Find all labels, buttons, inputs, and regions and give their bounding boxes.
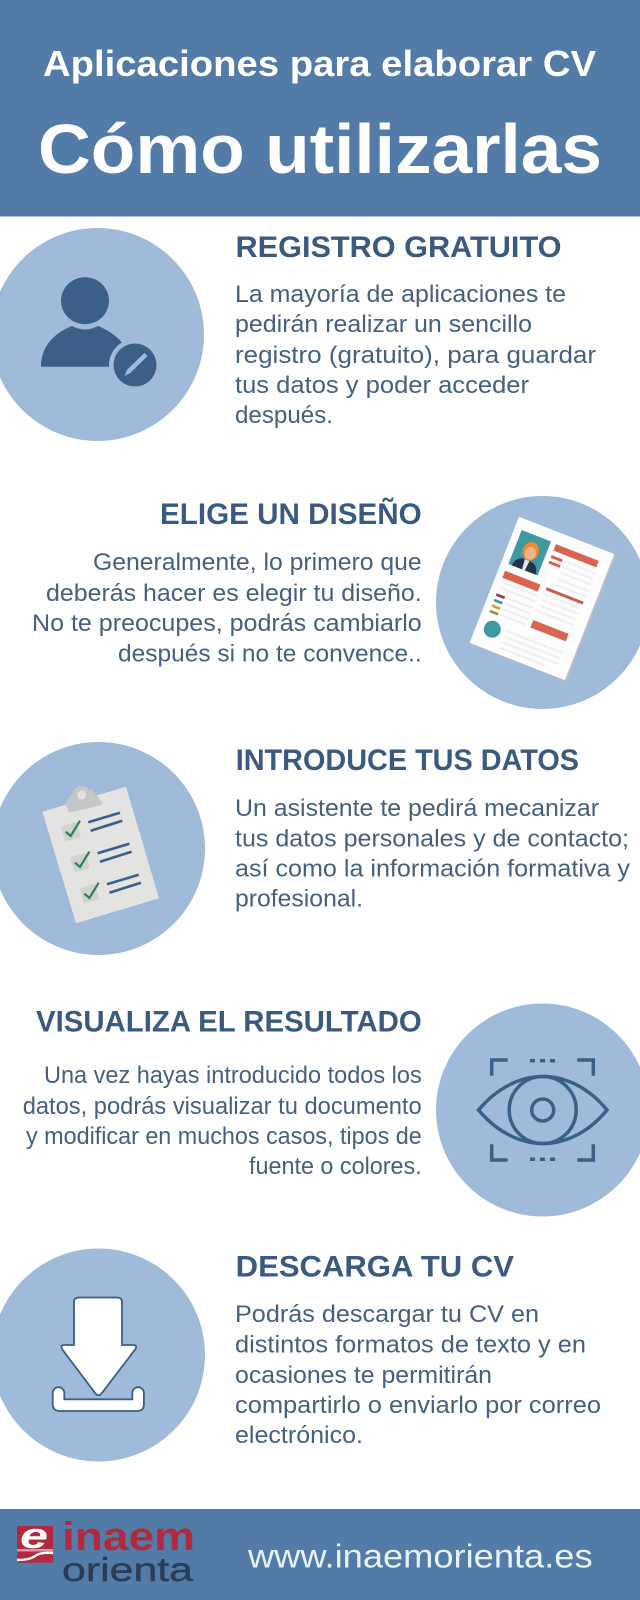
body text: deberás hacer es elegir tu diseño. — [46, 580, 422, 607]
icon: user with pencil — [0, 228, 204, 441]
body text: profesional. — [235, 886, 363, 913]
body text: No te preocupes, podrás cambiarlo — [32, 610, 422, 637]
icon: CV document — [436, 496, 640, 709]
body text: compartirlo o enviarlo por correo — [235, 1392, 601, 1419]
section 3: introduce tus datos — [0, 742, 630, 955]
logo: inaem orienta: orienta — [62, 1551, 194, 1588]
section 4: visualiza el resultado — [23, 1004, 640, 1216]
body text: registro (gratuito), para guardar — [235, 342, 596, 369]
title line: main: Cómo utilizarlas — [38, 110, 602, 188]
logo: inaem orienta: e — [20, 1515, 48, 1556]
section 5: descarga tu cv — [0, 1248, 601, 1462]
body text: Generalmente, lo primero que — [93, 549, 422, 576]
body text — [23, 1062, 422, 1180]
body text: y modificar en muchos casos, tipos de — [26, 1123, 422, 1150]
footer banner — [0, 1509, 640, 1600]
icon: download arrow — [0, 1248, 205, 1462]
body text: electrónico. — [235, 1422, 363, 1449]
icon: eye in viewfinder — [436, 1004, 640, 1216]
body text: Podrás descargar tu CV en — [235, 1301, 539, 1328]
body text: así como la información formativa y — [235, 856, 630, 883]
section 1: registro gratuito — [0, 228, 596, 441]
body text — [32, 549, 422, 668]
body text: pedirán realizar un sencillo — [235, 311, 532, 338]
body text: después si no te convence.. — [118, 641, 422, 668]
body text: La mayoría de aplicaciones te — [235, 281, 566, 308]
body text — [235, 795, 630, 913]
website url: www.inaemorienta.es — [247, 1538, 593, 1575]
body text — [235, 1301, 601, 1449]
section 2: elige un diseño — [32, 496, 640, 709]
heading: ELIGE UN DISEÑO — [160, 497, 422, 531]
body text: tus datos y poder acceder — [235, 372, 529, 399]
body text — [235, 281, 596, 429]
body text: tus datos personales y de contacto; — [235, 826, 629, 853]
body text: ocasiones te permitirán — [235, 1362, 492, 1389]
body text: Un asistente te pedirá mecanizar — [235, 795, 599, 822]
body text: datos, podrás visualizar tu documento — [23, 1093, 422, 1120]
heading: REGISTRO GRATUITO — [236, 231, 562, 264]
logo: inaem orienta: inaem — [62, 1515, 195, 1559]
heading: INTRODUCE TUS DATOS — [236, 744, 579, 777]
header banner — [0, 0, 640, 216]
heading: VISUALIZA EL RESULTADO — [36, 1006, 422, 1039]
body text: distintos formatos de texto y en — [235, 1332, 586, 1359]
body text: Una vez hayas introducido todos los — [44, 1062, 422, 1089]
body text: después. — [235, 402, 333, 429]
icon: checklist clipboard — [0, 742, 205, 955]
body text: fuente o colores. — [249, 1153, 422, 1180]
logo: inaem orienta — [17, 1515, 195, 1588]
title line: subject: Aplicaciones para elaborar CV — [43, 43, 596, 84]
heading: DESCARGA TU CV — [236, 1251, 514, 1284]
